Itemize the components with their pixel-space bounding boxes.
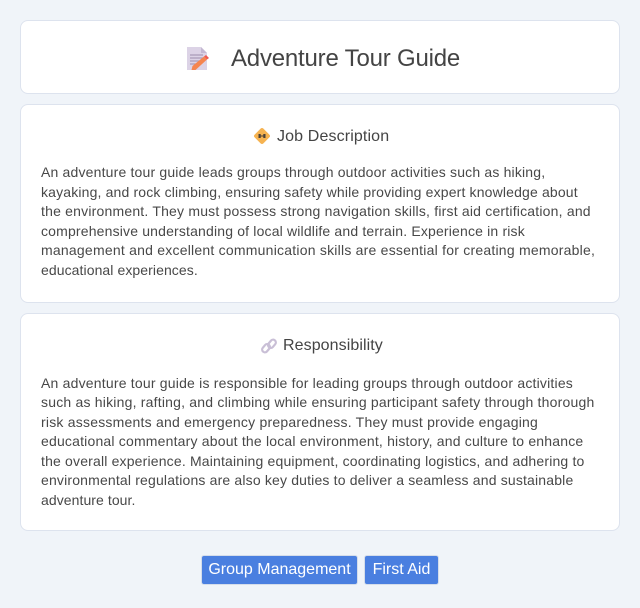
text: responsibility: such as hiking, rafting, and climbing while ensuring participant safety through thorough	[41, 394, 594, 410]
text: responsibility: educational commentary about the local environment, history, and culture to enhance	[41, 433, 583, 449]
text: job description: management and excellent communication skills are essential for creating memorable,	[41, 242, 595, 258]
text: responsibility	[41, 375, 594, 508]
text: responsibility: adventure tour.	[41, 492, 135, 508]
text: responsibility: risk assessments and emergency preparedness. They must provide engaging	[41, 414, 538, 430]
text: job description: An adventure tour guide leads groups through outdoor activities such as hiking,	[41, 164, 545, 180]
title card	[20, 20, 620, 94]
text: job description: educational experiences.	[41, 262, 198, 278]
icon: document with pencil	[187, 47, 209, 70]
text: job description: kayaking, and rock climbing, ensuring safety while providing expert knowledge about	[41, 184, 578, 200]
tag: first aid: First Aid	[373, 561, 430, 578]
text: responsibility: the overall experience. Maintaining equipment, coordinating logistics, and adhering to	[41, 453, 584, 469]
text: job description: comprehensive understanding of local wildlife and terrain. Experience in risk	[41, 223, 525, 239]
tag: group management: Group Management	[208, 561, 351, 578]
text: job description: the environment. They must possess strong navigation skills, first aid certification, and	[41, 203, 591, 219]
heading: responsibility: Responsibility	[283, 337, 383, 354]
tag: group management	[201, 555, 358, 585]
text: job description	[41, 164, 595, 278]
icon: diamond sign	[254, 128, 270, 144]
icon: chain link	[261, 338, 277, 354]
tag: first aid	[364, 555, 439, 585]
text: responsibility: environmental regulations are also key duties to deliver a seamless and sustainable	[41, 472, 573, 488]
text: responsibility: An adventure tour guide is responsible for leading groups through outdoor activities	[41, 375, 573, 391]
panel: job description	[20, 104, 620, 303]
heading: job description: Job Description	[277, 128, 389, 145]
title: Adventure Tour Guide	[231, 45, 460, 72]
panel: responsibility	[20, 313, 620, 531]
